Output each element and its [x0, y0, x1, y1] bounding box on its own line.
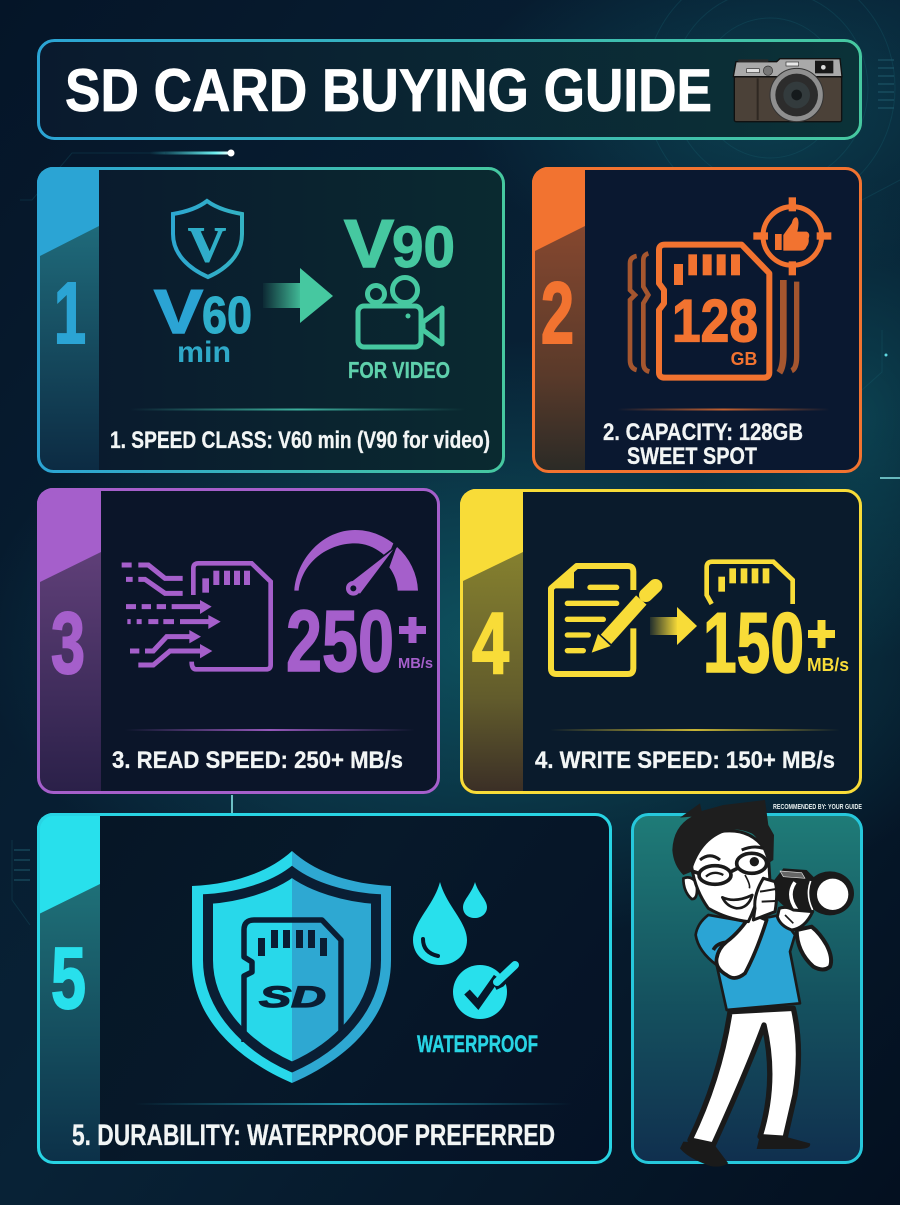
number 4: 4: [472, 595, 509, 692]
caption 2: SWEET SPOT: [627, 443, 757, 470]
value: 250+ MB/s: 250: [286, 593, 394, 690]
V60 min label: V: [154, 278, 203, 347]
small credit text: RECOMMENDED BY: YOUR GUIDE: [773, 802, 862, 811]
arrow: [263, 268, 333, 323]
illustration: photographer with camera: [672, 800, 854, 1167]
V60 min label: min: [177, 336, 231, 369]
value: 250+ MB/s: MB/s: [398, 655, 433, 672]
value: 150+ MB/s: MB/s: [807, 655, 849, 675]
V90 label: V: [344, 206, 394, 282]
number 5: 5: [51, 930, 86, 1027]
icon: V shield: [173, 201, 242, 277]
caption 3: 3. READ SPEED: 250+ MB/s: [112, 747, 403, 774]
icon: 128GB SD card: GB: [731, 348, 757, 369]
V60 min label: [154, 278, 252, 369]
icon: video camera: [358, 278, 442, 347]
icon: shield with SD card: [192, 851, 391, 1083]
icon: water drops: [413, 882, 487, 965]
icon: speed gauge: [294, 530, 418, 596]
caption 2: 2. CAPACITY: 128GB: [603, 419, 803, 446]
V90 label: 90: [392, 215, 455, 280]
V60 min label: 60: [202, 287, 252, 345]
vertical spark: [231, 795, 233, 813]
V90 label: [344, 206, 455, 282]
header panel: [38, 40, 860, 138]
caption 4: 4. WRITE SPEED: 150+ MB/s: [535, 747, 835, 774]
number 2: 2: [541, 265, 574, 362]
caption 2: [603, 419, 803, 470]
icon: 128GB SD card: 128: [672, 287, 758, 355]
comet light streak: [150, 150, 234, 156]
caption 5: 5. DURABILITY: WATERPROOF PREFERRED: [72, 1119, 555, 1152]
icon: check badge: [453, 965, 515, 1019]
label: for video: FOR VIDEO: [348, 357, 450, 383]
icon: SD card: [707, 562, 793, 604]
label: waterproof: WATERPROOF: [417, 1031, 538, 1058]
title: SD CARD BUYING GUIDE: [65, 57, 712, 124]
icon: document and pencil: [551, 566, 655, 674]
panel 2: capacity: [532, 167, 860, 473]
number 1: 1: [54, 265, 86, 362]
arrow: [650, 607, 697, 645]
caption 1: 1. SPEED CLASS: V60 min (V90 for video): [110, 427, 490, 454]
panel 4: write speed: [460, 489, 860, 794]
value: 150+ MB/s: 150: [703, 596, 804, 691]
panel 3: read speed: [37, 488, 438, 794]
icon: data streams into SD card: [122, 563, 271, 669]
number 3: 3: [51, 595, 85, 692]
icon: 128GB SD card: [630, 245, 797, 378]
panel 1: speed class: [37, 167, 504, 473]
icon: V shield: V: [188, 216, 226, 272]
icon: thumbs up target: [753, 197, 831, 275]
panel 6: photographer: [632, 800, 862, 1167]
icon: shield with SD card: SD: [259, 981, 326, 1014]
panel 5: durability: [37, 813, 610, 1164]
icon: camera: [733, 59, 842, 122]
